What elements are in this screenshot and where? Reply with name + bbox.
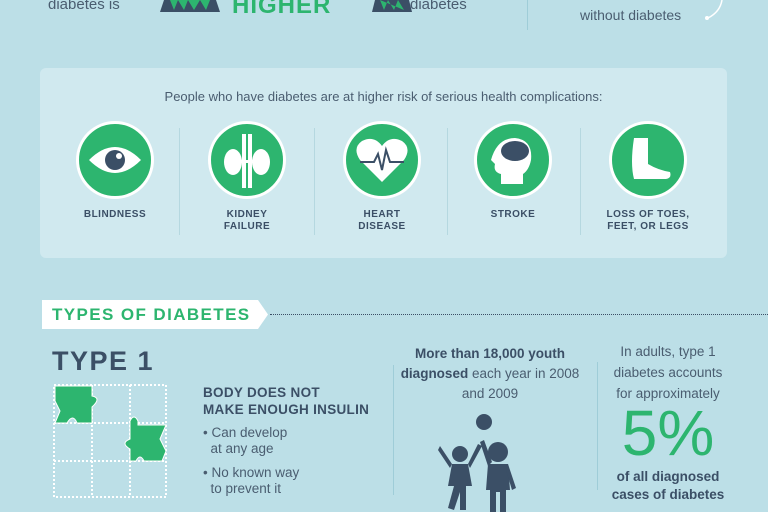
icon: heart (343, 121, 421, 199)
label: kidney failure: FAILURE (224, 221, 270, 232)
heading: type 1: TYPE 1 (52, 346, 154, 376)
label: loss of toes (606, 209, 690, 232)
text: adults 5%: In adults, type 1 diabetes accounts for approximately (614, 344, 722, 401)
icon: foot (609, 121, 687, 199)
label: heart disease (358, 209, 406, 232)
icon: grass left (160, 0, 220, 12)
text: body does not make enough insulin: MAKE ENOUGH INSULIN (203, 402, 369, 417)
heading banner: types of diabetes: TYPES OF DIABETES (52, 305, 251, 324)
text: body does not make enough insulin: BODY DOES NOT (203, 385, 320, 400)
text: youth diagnosed: More than 18,000 youth diagnosed each year in 2008 and 2009 (401, 346, 579, 401)
panel: complications (40, 68, 727, 258)
label: blindness: BLINDNESS (84, 209, 146, 220)
text: body does not make enough insulin (203, 385, 369, 417)
text: without diabetes: without diabetes (580, 7, 681, 23)
bullets: at any age • No known way (203, 441, 299, 480)
bullets (203, 425, 300, 496)
icon: puzzle (53, 384, 167, 498)
icon: kids with ball (438, 414, 516, 512)
heading banner: types of diabetes (42, 300, 268, 329)
bullets: • Can develop (203, 425, 287, 440)
icon: eye (76, 121, 154, 199)
label: kidney failure (224, 209, 270, 232)
label: loss of toes: LOSS OF TOES, (606, 209, 690, 220)
label: heart disease: HEART (364, 209, 400, 220)
label: kidney failure: KIDNEY (227, 209, 267, 220)
label: loss of toes: FEET, OR LEGS (607, 221, 689, 232)
panel text: People who have diabetes are at higher risk of serious health complications: (165, 89, 602, 104)
decorative curve (705, 0, 723, 20)
icon: head brain (474, 121, 552, 199)
icon: grass right (372, 0, 412, 12)
label: heart disease: DISEASE (358, 221, 406, 232)
text: of all diagnosed: of all diagnosed cases of diabetes (612, 469, 724, 502)
label: stroke: STROKE (491, 209, 535, 220)
icon: kidneys (208, 121, 286, 199)
bullets: to prevent it (210, 481, 281, 496)
stat: 5%: 5% (622, 397, 714, 469)
